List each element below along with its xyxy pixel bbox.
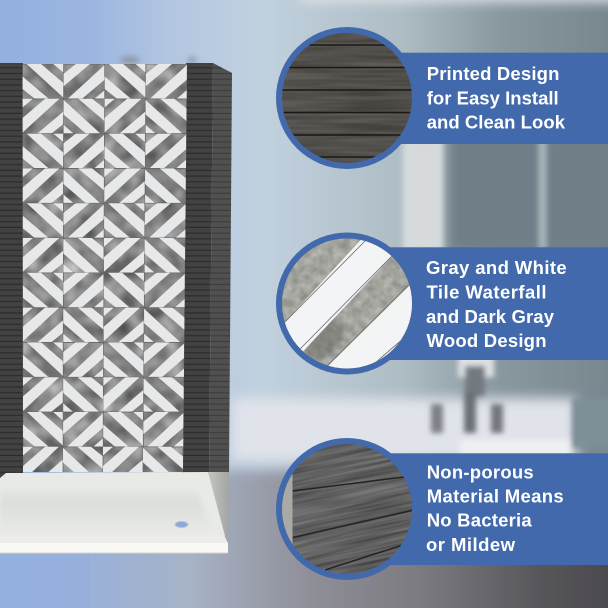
caption: and Dark Gray	[426, 306, 555, 327]
caption	[426, 461, 564, 555]
drain	[175, 521, 188, 528]
shower wall kit	[0, 62, 232, 554]
caption	[427, 63, 566, 133]
caption: for Easy Install	[427, 87, 559, 108]
tile close-up	[282, 238, 412, 368]
circle ring	[276, 438, 418, 580]
wood close-up	[280, 31, 414, 165]
feature 3: non-porous material	[276, 438, 608, 580]
blue banner	[390, 453, 608, 565]
feature 1: printed design	[276, 27, 608, 169]
angled wood close-up	[282, 444, 412, 574]
pan front lip	[0, 535, 228, 554]
lower return panel	[208, 472, 229, 544]
caption: Tile Waterfall	[426, 281, 546, 302]
caption: Printed Design	[427, 63, 559, 84]
circle ring	[276, 232, 418, 374]
gray and white tile waterfall	[20, 62, 190, 482]
caption: Gray and White	[426, 257, 567, 278]
right dark wood wall panel	[182, 63, 213, 473]
caption: No Bacteria	[427, 510, 532, 531]
blue banner	[390, 53, 608, 144]
caption: Non-porous	[427, 461, 534, 482]
caption: Material Means	[427, 485, 564, 506]
left dark wood wall panel	[0, 63, 23, 481]
feature 2: tile and wood design	[275, 232, 608, 378]
circle ring	[276, 27, 418, 169]
caption: and Clean Look	[427, 112, 566, 133]
shower pan	[0, 472, 225, 536]
caption	[426, 257, 567, 351]
caption: or Mildew	[426, 534, 516, 555]
right return wood wall	[209, 63, 232, 473]
blue banner	[390, 247, 608, 360]
caption: Wood Design	[426, 330, 546, 351]
